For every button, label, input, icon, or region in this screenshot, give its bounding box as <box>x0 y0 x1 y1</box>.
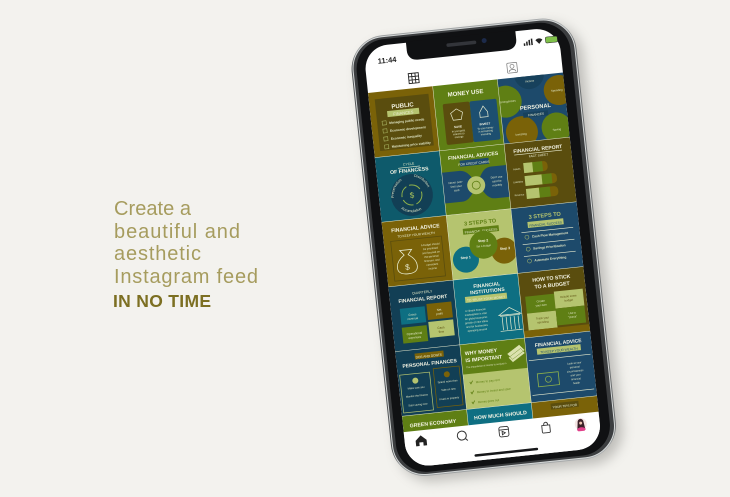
tile: financial advices: card <box>454 188 460 193</box>
tile: quarterly report: FINANCIAL REPORT <box>398 294 448 305</box>
tile: financial report: FACT SHEET <box>529 153 548 159</box>
tile: budget: Track your <box>536 315 549 321</box>
tile: quarterly report: QUARTERLY <box>412 289 433 295</box>
tile: dos and donts: Invest in property <box>439 395 460 401</box>
tile: financial report <box>504 137 577 209</box>
tile: financial advice wealth: $ <box>405 263 411 272</box>
tile: financial advices: Don't use <box>490 174 503 180</box>
tile: money use: To use money <box>477 125 494 131</box>
tile: budget <box>518 266 590 338</box>
tile: financial advices: Never over- <box>448 180 463 185</box>
tile: personal finances: Saving <box>552 127 562 132</box>
tile: financial advice wealth <box>382 215 453 287</box>
tile: financial institutions: FINANCIAL <box>473 281 501 290</box>
tile: personal finances: Spending <box>551 88 563 93</box>
nav search icon <box>457 431 468 442</box>
tile: financial institutions: operating around <box>467 327 488 333</box>
tile: financial advices <box>439 144 511 215</box>
tile: financial institutions: marketplace is vital <box>465 311 487 317</box>
tile: three steps circles: Step 2 <box>478 238 488 243</box>
tile: budget: your own <box>535 302 547 308</box>
tile: cycle of finances: CYCLE <box>403 161 415 167</box>
tile: financial advices: FINANCIAL ADVICES <box>448 151 499 162</box>
tile: financial advice cash: Look at your <box>567 360 582 366</box>
tile: financial institutions: growth of new ideas <box>465 319 489 325</box>
tile: budget: Create <box>536 299 546 304</box>
tile: public finances: Maintaining price stability <box>392 141 431 149</box>
tile: public finances: PUBLIC <box>391 102 415 111</box>
tile: cycle of finances: Accumulation <box>401 207 422 212</box>
tile: cycle of finances: Distribution <box>414 174 430 188</box>
bottom nav bar <box>404 412 600 466</box>
tile: money use: MONEY USE <box>447 89 484 99</box>
tile: financial report: Revenue <box>515 193 525 197</box>
tile: financial report: Assets <box>513 167 521 171</box>
tile: dos and donts: PERSONAL FINANCES <box>402 358 458 370</box>
tile: budget: TO A BUDGET <box>534 281 571 291</box>
tile: money use: interest to <box>453 131 465 136</box>
tile: how much should: HOW MUCH SHOULD <box>474 410 527 422</box>
camera <box>481 38 487 43</box>
tile: financial advice wealth: be prioritized <box>423 245 439 251</box>
tile: financial advice cash <box>524 331 597 403</box>
tile: three steps list <box>511 202 583 273</box>
tile: money use: INVEST <box>479 121 491 127</box>
tile: your tips <box>531 396 599 418</box>
home indicator <box>474 448 538 457</box>
tagged tab icon <box>507 62 518 73</box>
tile: public finances: Managing public needs <box>389 117 425 125</box>
tile: personal finances: FINANCES <box>528 112 544 117</box>
tile: financial advice wealth: TO KEEP YOUR WEALTH <box>397 231 436 239</box>
phone rim <box>350 17 618 478</box>
tile: quarterly report: expenses <box>408 335 422 340</box>
tile: dos and donts: Monitor the finance <box>406 392 429 399</box>
tile: three steps circles: Step 3 <box>500 246 510 251</box>
tile: why money: Money to invest and save <box>477 387 511 394</box>
tile: money use: savings <box>454 134 464 139</box>
status icons <box>523 36 558 46</box>
tile: why money: Money goes out <box>478 398 500 404</box>
headline: Create a <box>114 198 192 220</box>
notch <box>406 30 517 61</box>
tile: cycle of finances <box>374 151 446 222</box>
tile: financial advice cash: and your <box>570 372 581 377</box>
phone frame <box>348 15 619 479</box>
tile: three steps list: Savings Prioritization <box>533 243 566 251</box>
tile: why money: Money to pay rent <box>476 378 500 384</box>
tile: budget: Include some <box>560 293 577 299</box>
tile: dos and donts: DOS AND DONTS <box>416 353 442 359</box>
tile: money use: SAVE <box>454 124 462 129</box>
tile: quarterly report: flow <box>438 329 445 334</box>
nav shop icon <box>541 422 550 433</box>
tile: financial advices: FOR CREDIT CARDS <box>458 160 490 167</box>
tile: personal finances: Emergencies <box>499 99 517 104</box>
tile: dos and donts <box>395 345 467 416</box>
tile: financial advice wealth: the personal <box>424 253 439 259</box>
tile: dos and donts: Take on new <box>441 386 456 392</box>
tile: public finances: Economic inequality <box>391 134 422 141</box>
tile: money use: in increasing <box>478 128 494 134</box>
tile: quarterly report: profit <box>436 311 443 316</box>
tile: financial advices: monthly <box>492 182 503 187</box>
screen <box>363 27 602 468</box>
phone shadow <box>355 20 626 485</box>
tile: dos and donts: Spend more than <box>437 378 458 384</box>
tile: financial advice wealth: FINANCIAL ADVICE <box>391 223 441 234</box>
tile: how much should <box>466 402 533 426</box>
tile: three steps list: 3 STEPS TO <box>529 211 562 221</box>
tile: personal finances: Investing <box>515 132 527 137</box>
tile: three steps circles: 3 STEPS TO <box>464 218 497 228</box>
tile: financial advice wealth: finances, and <box>424 257 440 263</box>
tile: green economy <box>402 409 469 436</box>
headline: aesthetic <box>114 243 201 265</box>
tile: budget: HOW TO STICK <box>532 274 571 284</box>
tile: why money: IS IMPORTANT <box>465 354 503 364</box>
tile: financial advices: limit your <box>450 184 462 189</box>
tagline: IN NO TIME <box>113 291 211 311</box>
tile: financial institutions: and for businesses <box>466 323 489 329</box>
tile: financial advice wealth: consistent <box>426 262 439 267</box>
tile: financial advice wealth: A budget should <box>421 241 440 247</box>
tile: three steps list: FINANCIAL SUCCESS <box>529 220 562 228</box>
tile: three steps list: Automate Everything <box>534 255 567 263</box>
tile: financial advices: card for <box>492 179 502 183</box>
status time: 11:44 <box>377 55 398 66</box>
tile: financial institutions <box>453 273 524 345</box>
nav avatar <box>574 417 587 432</box>
tile: money use <box>433 79 504 151</box>
tile: quarterly report <box>388 280 460 352</box>
tile: public finances: FINANCES <box>393 109 414 116</box>
headline <box>113 198 258 311</box>
tile: financial advice cash: health <box>573 380 581 385</box>
tile: why money <box>460 338 531 409</box>
tile: financial report: Liabilities <box>513 180 524 184</box>
tile: money use: In just gotta <box>452 128 466 133</box>
tile: personal finances <box>497 72 570 144</box>
tile: dos and donts: Make sure you <box>407 385 425 390</box>
tile: personal finances: PERSONAL <box>520 103 552 112</box>
tile: quarterly report: Cash <box>437 325 445 330</box>
tile: dos and donts: Start saving now <box>408 401 428 407</box>
tile: three steps circles: FINANCIAL SUCCESS <box>465 227 498 235</box>
tile: quarterly report: Operational <box>406 331 423 336</box>
tile: budget: "check" <box>568 314 577 319</box>
speaker <box>446 40 476 47</box>
tile: budget: budget <box>564 298 573 303</box>
tile: financial institutions: for global economic <box>465 315 488 321</box>
tile: financial advice cash: financial <box>571 376 581 381</box>
headline: beautiful and <box>114 221 240 243</box>
tile: financial advice cash: circumstances <box>567 368 584 374</box>
tile: why money: The importance of money is not just in <box>466 362 507 369</box>
nav home icon <box>415 435 427 446</box>
tile: financial advice cash: TO KEEP YOUR WEALTH <box>540 346 579 354</box>
feed grid <box>368 72 600 466</box>
grid tab icon <box>408 73 419 84</box>
tile: three steps circles: Set a budget <box>476 243 491 249</box>
tile: cycle of finances: OF FINANCESS <box>390 166 429 176</box>
tile: budget: Use a <box>568 310 576 315</box>
tile: financial institutions: TO TRUST YOUR MONEY <box>467 295 506 303</box>
tile: budget: spending <box>537 319 549 325</box>
tile: financial institutions: A vibrant financial <box>465 307 486 313</box>
nav reels icon <box>499 426 509 437</box>
tile: quarterly report: Gross <box>408 312 417 317</box>
tile: personal finances: Income <box>525 79 535 84</box>
tile: your tips: YOUR TIPS FOR <box>552 403 578 409</box>
tile: financial advice wealth: income <box>428 266 438 271</box>
phone <box>352 18 628 487</box>
tile: money use: investing <box>481 131 492 136</box>
tile: why money: WHY MONEY <box>465 348 498 357</box>
phone bezel <box>354 20 613 475</box>
tile: financial advice cash: personal <box>570 364 580 369</box>
tile: public finances: Economic development <box>390 125 427 133</box>
tile: public finances <box>368 86 439 158</box>
grid lines <box>368 73 599 432</box>
tile: financial report: FINANCIAL REPORT <box>513 144 563 155</box>
tile: financial advice wealth: and focused on <box>422 249 441 255</box>
headline: Instagram feed <box>114 266 258 288</box>
tile: three steps circles: Step 1 <box>460 255 471 260</box>
tile: financial advice cash: FINANCIAL ADVICE <box>535 338 583 349</box>
tile: quarterly report: revenue <box>407 316 419 321</box>
tile: three steps list: Cash Flow Management <box>532 231 569 239</box>
tile: cycle of finances: $ <box>409 191 415 200</box>
tile: three steps circles <box>446 208 520 280</box>
tile: green economy: GREEN ECONOMY <box>409 419 457 429</box>
tile: quarterly report: Net <box>437 308 442 312</box>
tile: financial institutions: INSTITUTIONS <box>470 287 506 296</box>
tile: cycle of finances: Preservation <box>391 179 402 198</box>
